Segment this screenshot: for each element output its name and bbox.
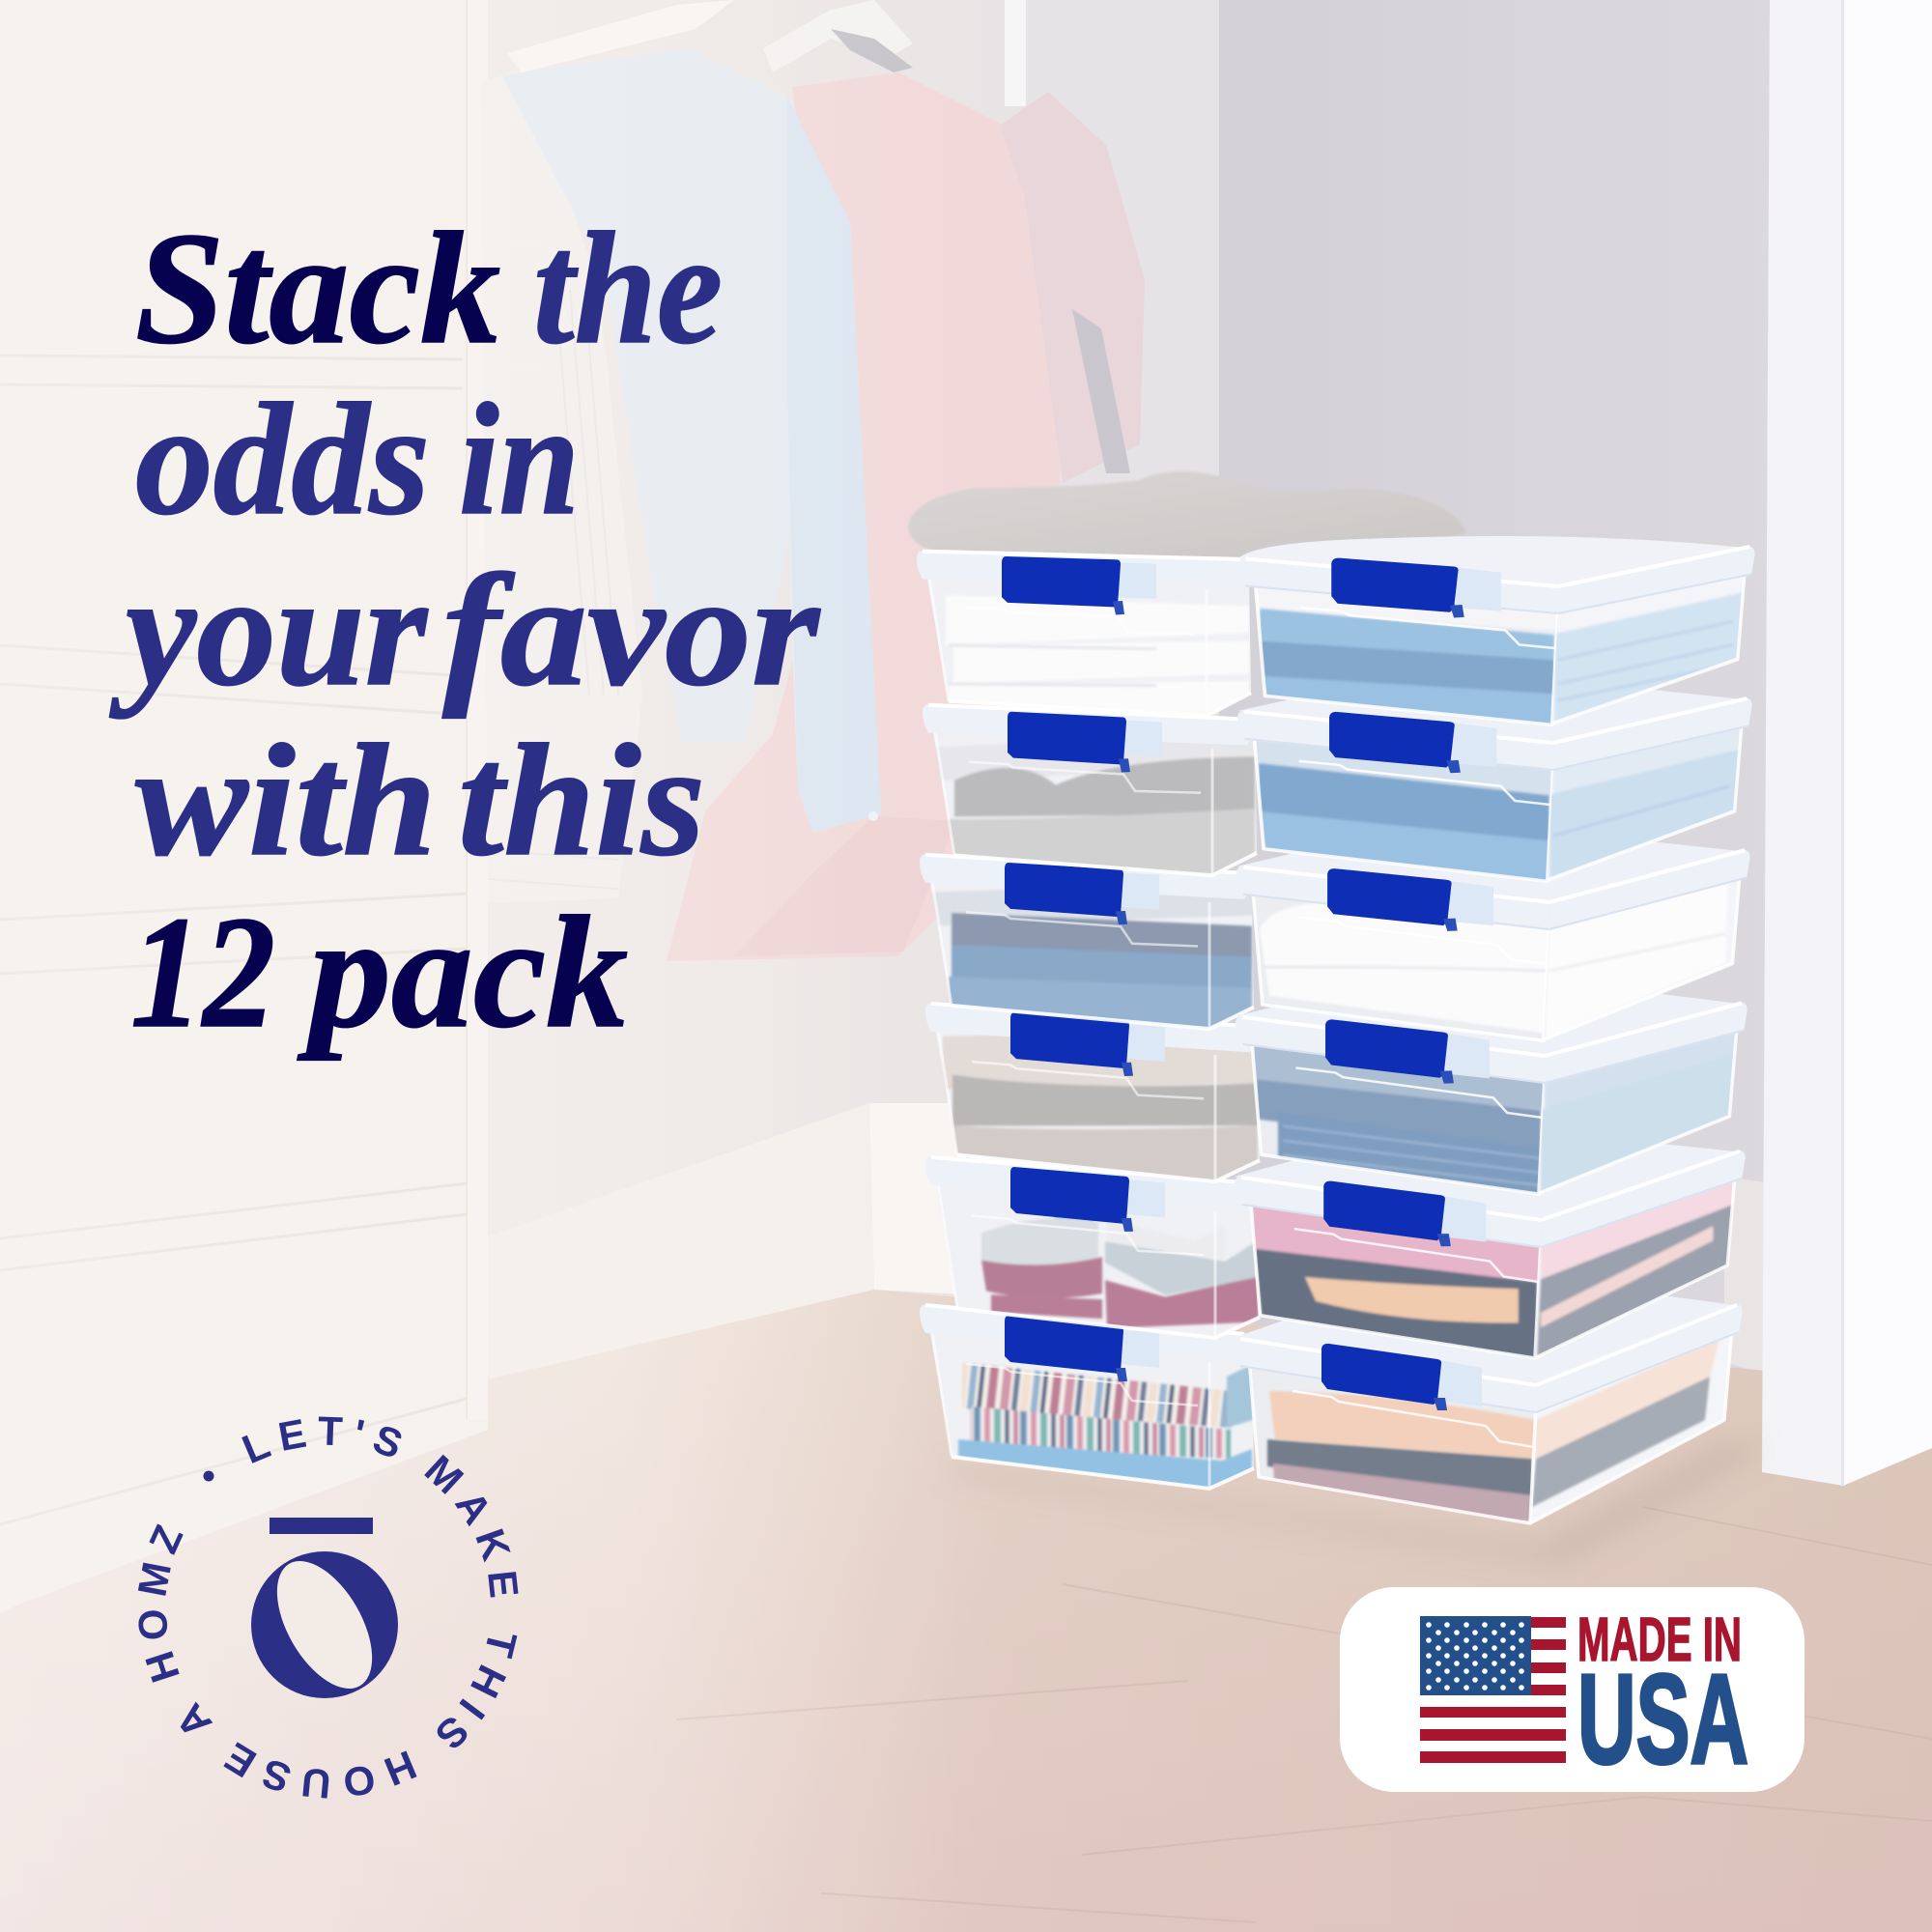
left bin 4: beige and grey: [925, 996, 1262, 1196]
headline: your: [109, 541, 428, 719]
left bin 3: blue folded stack: [920, 852, 1255, 1031]
MADE IN text: MADE IN: [1577, 1605, 1742, 1674]
headline: the: [533, 199, 723, 377]
floor planks: [676, 1507, 1932, 1922]
brand badge: [137, 1416, 518, 1799]
hangers: [507, 0, 734, 72]
badge dot: [203, 1470, 214, 1482]
right bin 2: blue blankets: [1237, 690, 1752, 883]
grey blanket on top: [908, 471, 1466, 560]
flag: [1420, 1616, 1566, 1763]
right bin 6: peach, dark and mauve: [1240, 1296, 1743, 1525]
grey wall right: [1217, 0, 1777, 1449]
right bin 5: pink, dark and peach: [1235, 1144, 1746, 1360]
headline: odds: [135, 370, 430, 548]
left bin 2: grey knits: [923, 703, 1258, 877]
left bin 1: white towels: [917, 549, 1252, 716]
baseboards: [488, 1103, 874, 1379]
door frame: [1762, 0, 1843, 1486]
right bin 4: slate blue folded: [1236, 994, 1747, 1196]
rear mauve garment: [1000, 92, 1145, 483]
headline: pack: [298, 883, 628, 1061]
white wall frame: [1005, 0, 1026, 106]
left bin 5: socks and knits: [925, 1153, 1260, 1341]
white ribbed hanging shirt: [481, 68, 642, 903]
headline: favor: [442, 541, 821, 719]
white badge panel: [1340, 1587, 1804, 1792]
headline: Stack: [135, 199, 500, 377]
right bin 3: white blankets: [1236, 842, 1750, 1042]
right bin 1: blue blankets with full lid: [1238, 536, 1754, 726]
headline: in: [459, 370, 580, 548]
light blue shirt: [502, 48, 881, 833]
pink shirt: [667, 72, 1061, 961]
headline: 12: [130, 883, 275, 1061]
Made in USA badge: [1340, 1587, 1804, 1792]
circular slogan: LET'S MAKE THIS HOUSE A HOMZ: [137, 1416, 518, 1799]
left bin 6: striped textiles: [920, 1304, 1254, 1489]
headline: with: [135, 711, 437, 889]
bin shadow on floor: [947, 1439, 1768, 1565]
headline: this: [458, 711, 705, 889]
logo O: [251, 1551, 398, 1698]
USA text: USA: [1577, 1648, 1748, 1790]
headline: [109, 199, 821, 1061]
back wall left: [0, 0, 1227, 1642]
left corner wall strip: [1026, 0, 1219, 1352]
logo bar: [270, 1518, 373, 1534]
left readability fade: [0, 0, 966, 1932]
floor: [0, 1290, 1932, 1932]
dresser: [0, 0, 488, 1611]
